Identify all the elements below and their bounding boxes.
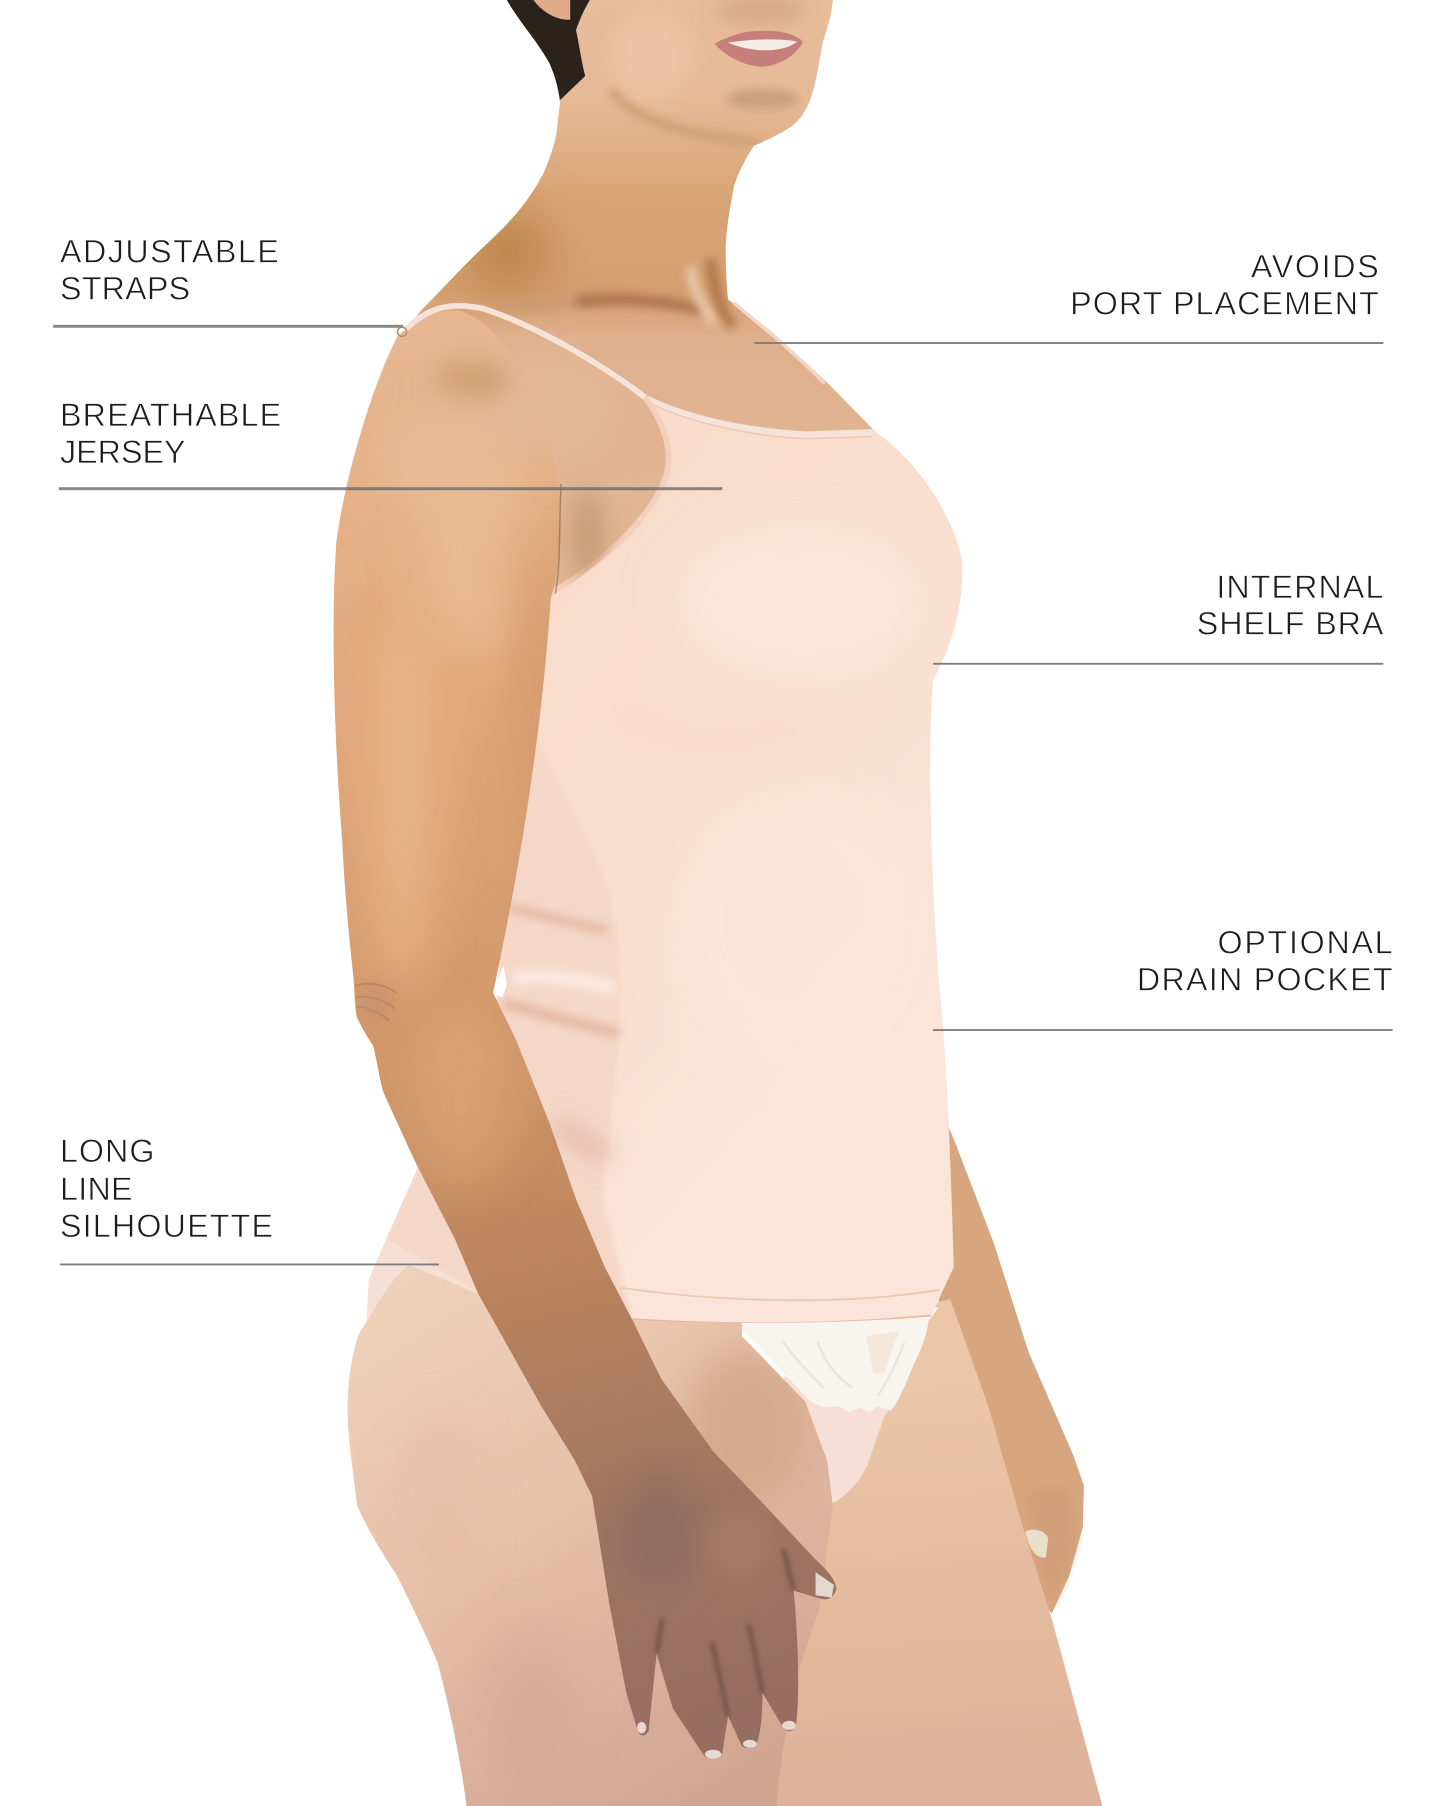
callout: avoids port placement: AVOIDS: [1251, 249, 1379, 285]
callout: long line silhouette: LONG: [60, 1133, 154, 1169]
elbow creases: [355, 984, 396, 1020]
neckline trim: [647, 399, 875, 434]
right thigh: [755, 1299, 1102, 1806]
callout: long line silhouette: [60, 1133, 439, 1265]
callout: breathable jersey: JERSEY: [60, 434, 186, 470]
white lace front: [720, 1307, 939, 1412]
white gap between arm and back: [493, 965, 507, 997]
left hip and thigh: [348, 1265, 833, 1806]
finger gaps: [657, 1549, 794, 1716]
callout: internal shelf bra: SHELF BRA: [1197, 606, 1384, 642]
neck, chest and face: [397, 0, 881, 599]
far arm and hand: [939, 1123, 1084, 1614]
callout: optional drain pocket: OPTIONAL: [1218, 925, 1393, 961]
armhole trim: [550, 397, 669, 593]
callout: internal shelf bra: INTERNAL: [1216, 569, 1383, 605]
hair: [507, 0, 590, 100]
camisole body: [386, 397, 962, 1324]
thumb nail: [816, 1572, 834, 1598]
ear: [533, 0, 570, 20]
near arm and hand: [334, 310, 836, 1759]
callout: breathable jersey: [59, 397, 722, 490]
callout: long line silhouette: LINE: [60, 1171, 133, 1207]
callout: optional drain pocket: DRAIN POCKET: [1137, 962, 1393, 998]
callout: breathable jersey: BREATHABLE: [60, 397, 281, 433]
briefs: pink fabric front: [783, 1376, 890, 1503]
callout: long line silhouette: SILHOUETTE: [60, 1208, 273, 1244]
lips: [714, 31, 803, 67]
callout: adjustable straps: [53, 234, 403, 328]
callout: avoids port placement: PORT PLACEMENT: [1070, 285, 1379, 321]
hem stitching: [621, 1288, 939, 1300]
shoulder and armpit shading: [406, 356, 618, 594]
briefs: side band: [366, 1239, 478, 1322]
callout: internal shelf bra: [933, 569, 1384, 665]
straps: [397, 303, 825, 397]
photo: woman wearing camisole: [334, 0, 1102, 1806]
callout: optional drain pocket: [933, 925, 1393, 1031]
finger nails: [637, 1721, 796, 1759]
far hand fingernail: [1025, 1530, 1048, 1558]
callout: avoids port placement: [755, 249, 1383, 344]
callout: adjustable straps: ADJUSTABLE: [60, 234, 279, 270]
back panel: [390, 896, 631, 1316]
callout: adjustable straps: STRAPS: [60, 270, 190, 306]
